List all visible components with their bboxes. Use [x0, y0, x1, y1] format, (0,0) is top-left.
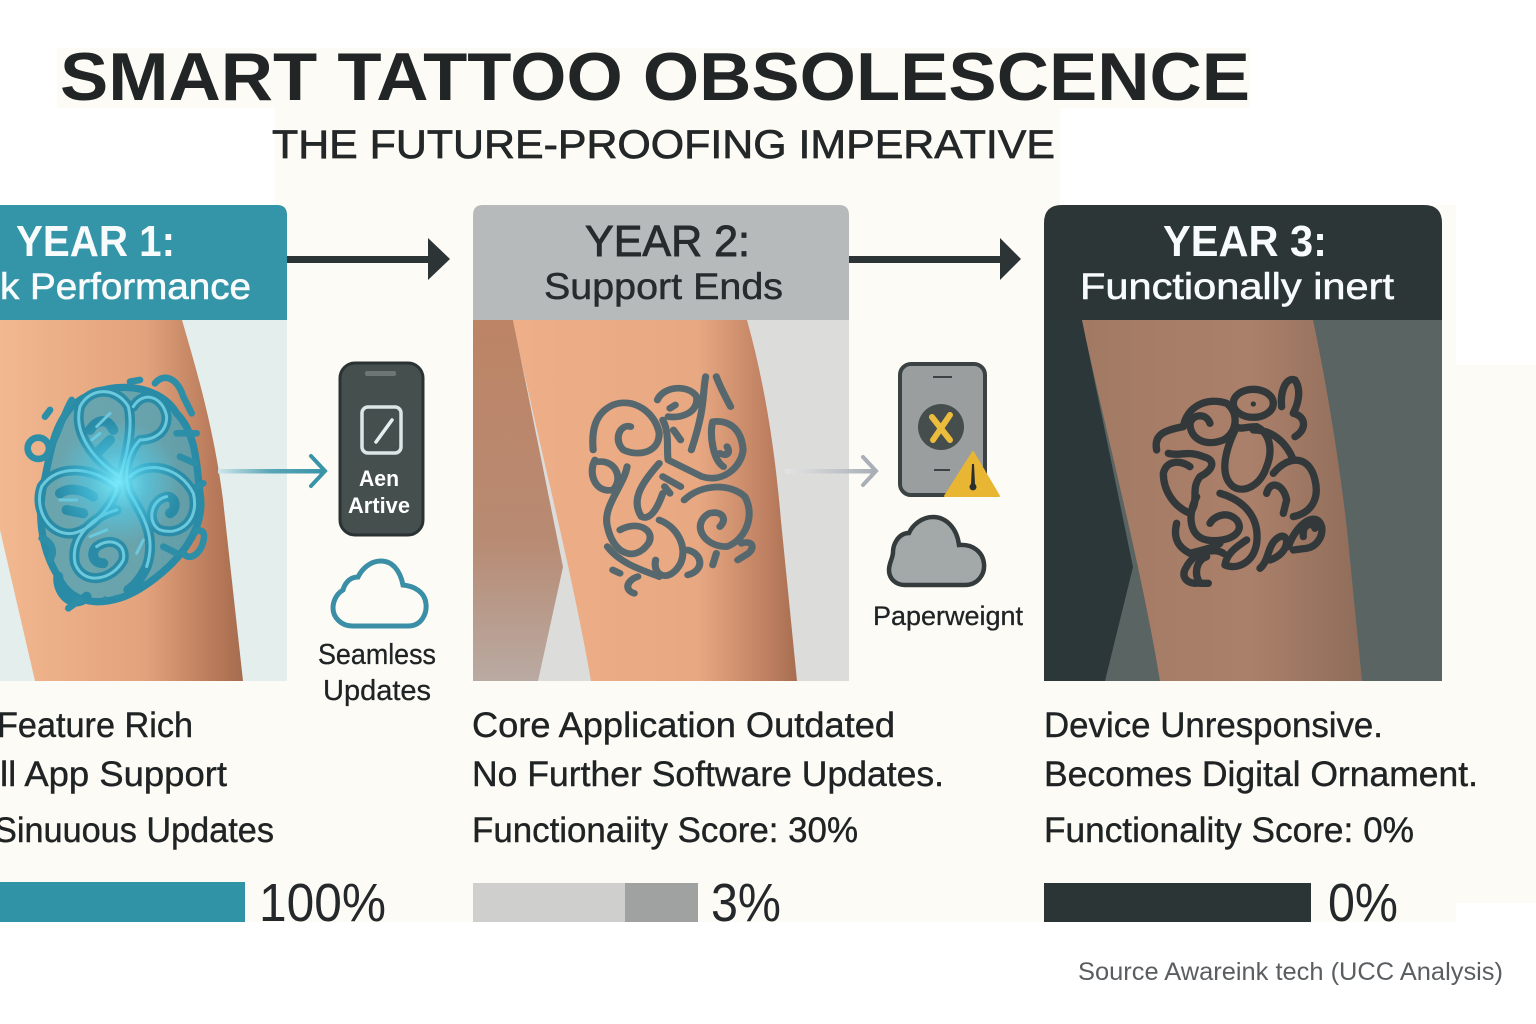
year 1 tattoo glow [56, 420, 180, 544]
year 2 status text [472, 706, 944, 850]
cloud label: Seamless [318, 639, 436, 671]
phone label [348, 466, 410, 518]
year 2 background arm [473, 320, 563, 681]
arrow: tattoo to phone (teal) [218, 456, 325, 486]
year 2 score: 3% [711, 873, 781, 933]
year 2 faded tattoo [592, 377, 752, 593]
year 2 arm [513, 320, 797, 681]
title: SMART TATTOO OBSOLESCENCE [60, 39, 1250, 115]
year 1 feature text: Feature Rich [0, 706, 193, 745]
year 2 illustration background [473, 320, 849, 681]
cloud label: Updates [323, 675, 431, 707]
year 1 functionality bar [0, 882, 245, 922]
year 3 status text: Becomes Digital Ornament. [1044, 755, 1478, 794]
year 1 feature text: ll App Support [0, 755, 227, 794]
panel: year 2 [473, 205, 849, 681]
year 1 subheading: k Performance [0, 266, 251, 307]
year 3 heading: YEAR 3: [1163, 217, 1327, 266]
phone label: Aen [359, 466, 399, 491]
year 2 status text: Functionaiity Score: 30% [472, 811, 858, 850]
source note: Source Awareink tech (UCC Analysis) [1078, 958, 1503, 986]
year 3 status text: Functionality Score: 0% [1044, 811, 1414, 850]
year 2 heading: YEAR 2: [585, 217, 750, 266]
year 3 dead tattoo [1156, 379, 1322, 583]
warning triangle [945, 452, 999, 496]
icon: cloud outline [333, 561, 426, 626]
year 1 glowing tattoo [28, 378, 204, 608]
arrow: year 1 to year 2 [287, 238, 450, 280]
arrow: tattoo to phone (grey) [785, 457, 876, 485]
panel: year 1 [0, 205, 287, 681]
icon: grey cloud [889, 517, 984, 585]
year 2 status text: No Further Software Updates. [472, 755, 944, 794]
year 1 feature text [0, 706, 274, 850]
cloud label: Paperweignt [873, 601, 1023, 631]
year 1 header [0, 205, 287, 320]
year 2 functionality bar [473, 883, 698, 922]
icon: failed phone with warning [900, 364, 999, 496]
subtitle: THE FUTURE-PROOFING IMPERATIVE [272, 123, 1055, 167]
year 3 arm [1082, 320, 1362, 681]
cloud label [318, 639, 436, 707]
year 2 header [473, 205, 849, 320]
year 3 functionality bar [1044, 883, 1311, 922]
phone label: Artive [348, 493, 410, 518]
year 3 status text: Device Unresponsive. [1044, 706, 1383, 745]
year 3 score: 0% [1328, 873, 1398, 933]
arrow: year 2 to year 3 [849, 238, 1021, 280]
panel: year 3 [1044, 205, 1442, 681]
year 2 status text: Core Application Outdated [472, 706, 895, 745]
year 3 header [1044, 205, 1442, 320]
year 2 subheading: Support Ends [544, 266, 783, 307]
year 3 background arm [1044, 320, 1133, 681]
year 1 score: 100% [259, 873, 386, 933]
icon: active phone [340, 363, 423, 535]
year 3 status text [1044, 706, 1478, 850]
year 1 feature text: Sinuuous Updates [0, 811, 274, 850]
year 3 subheading: Functionally inert [1080, 266, 1395, 307]
year 1 illustration background [0, 320, 287, 681]
year 1 heading: YEAR 1: [16, 217, 175, 266]
year 3 illustration background [1044, 320, 1442, 681]
year 1 arm [0, 320, 243, 681]
